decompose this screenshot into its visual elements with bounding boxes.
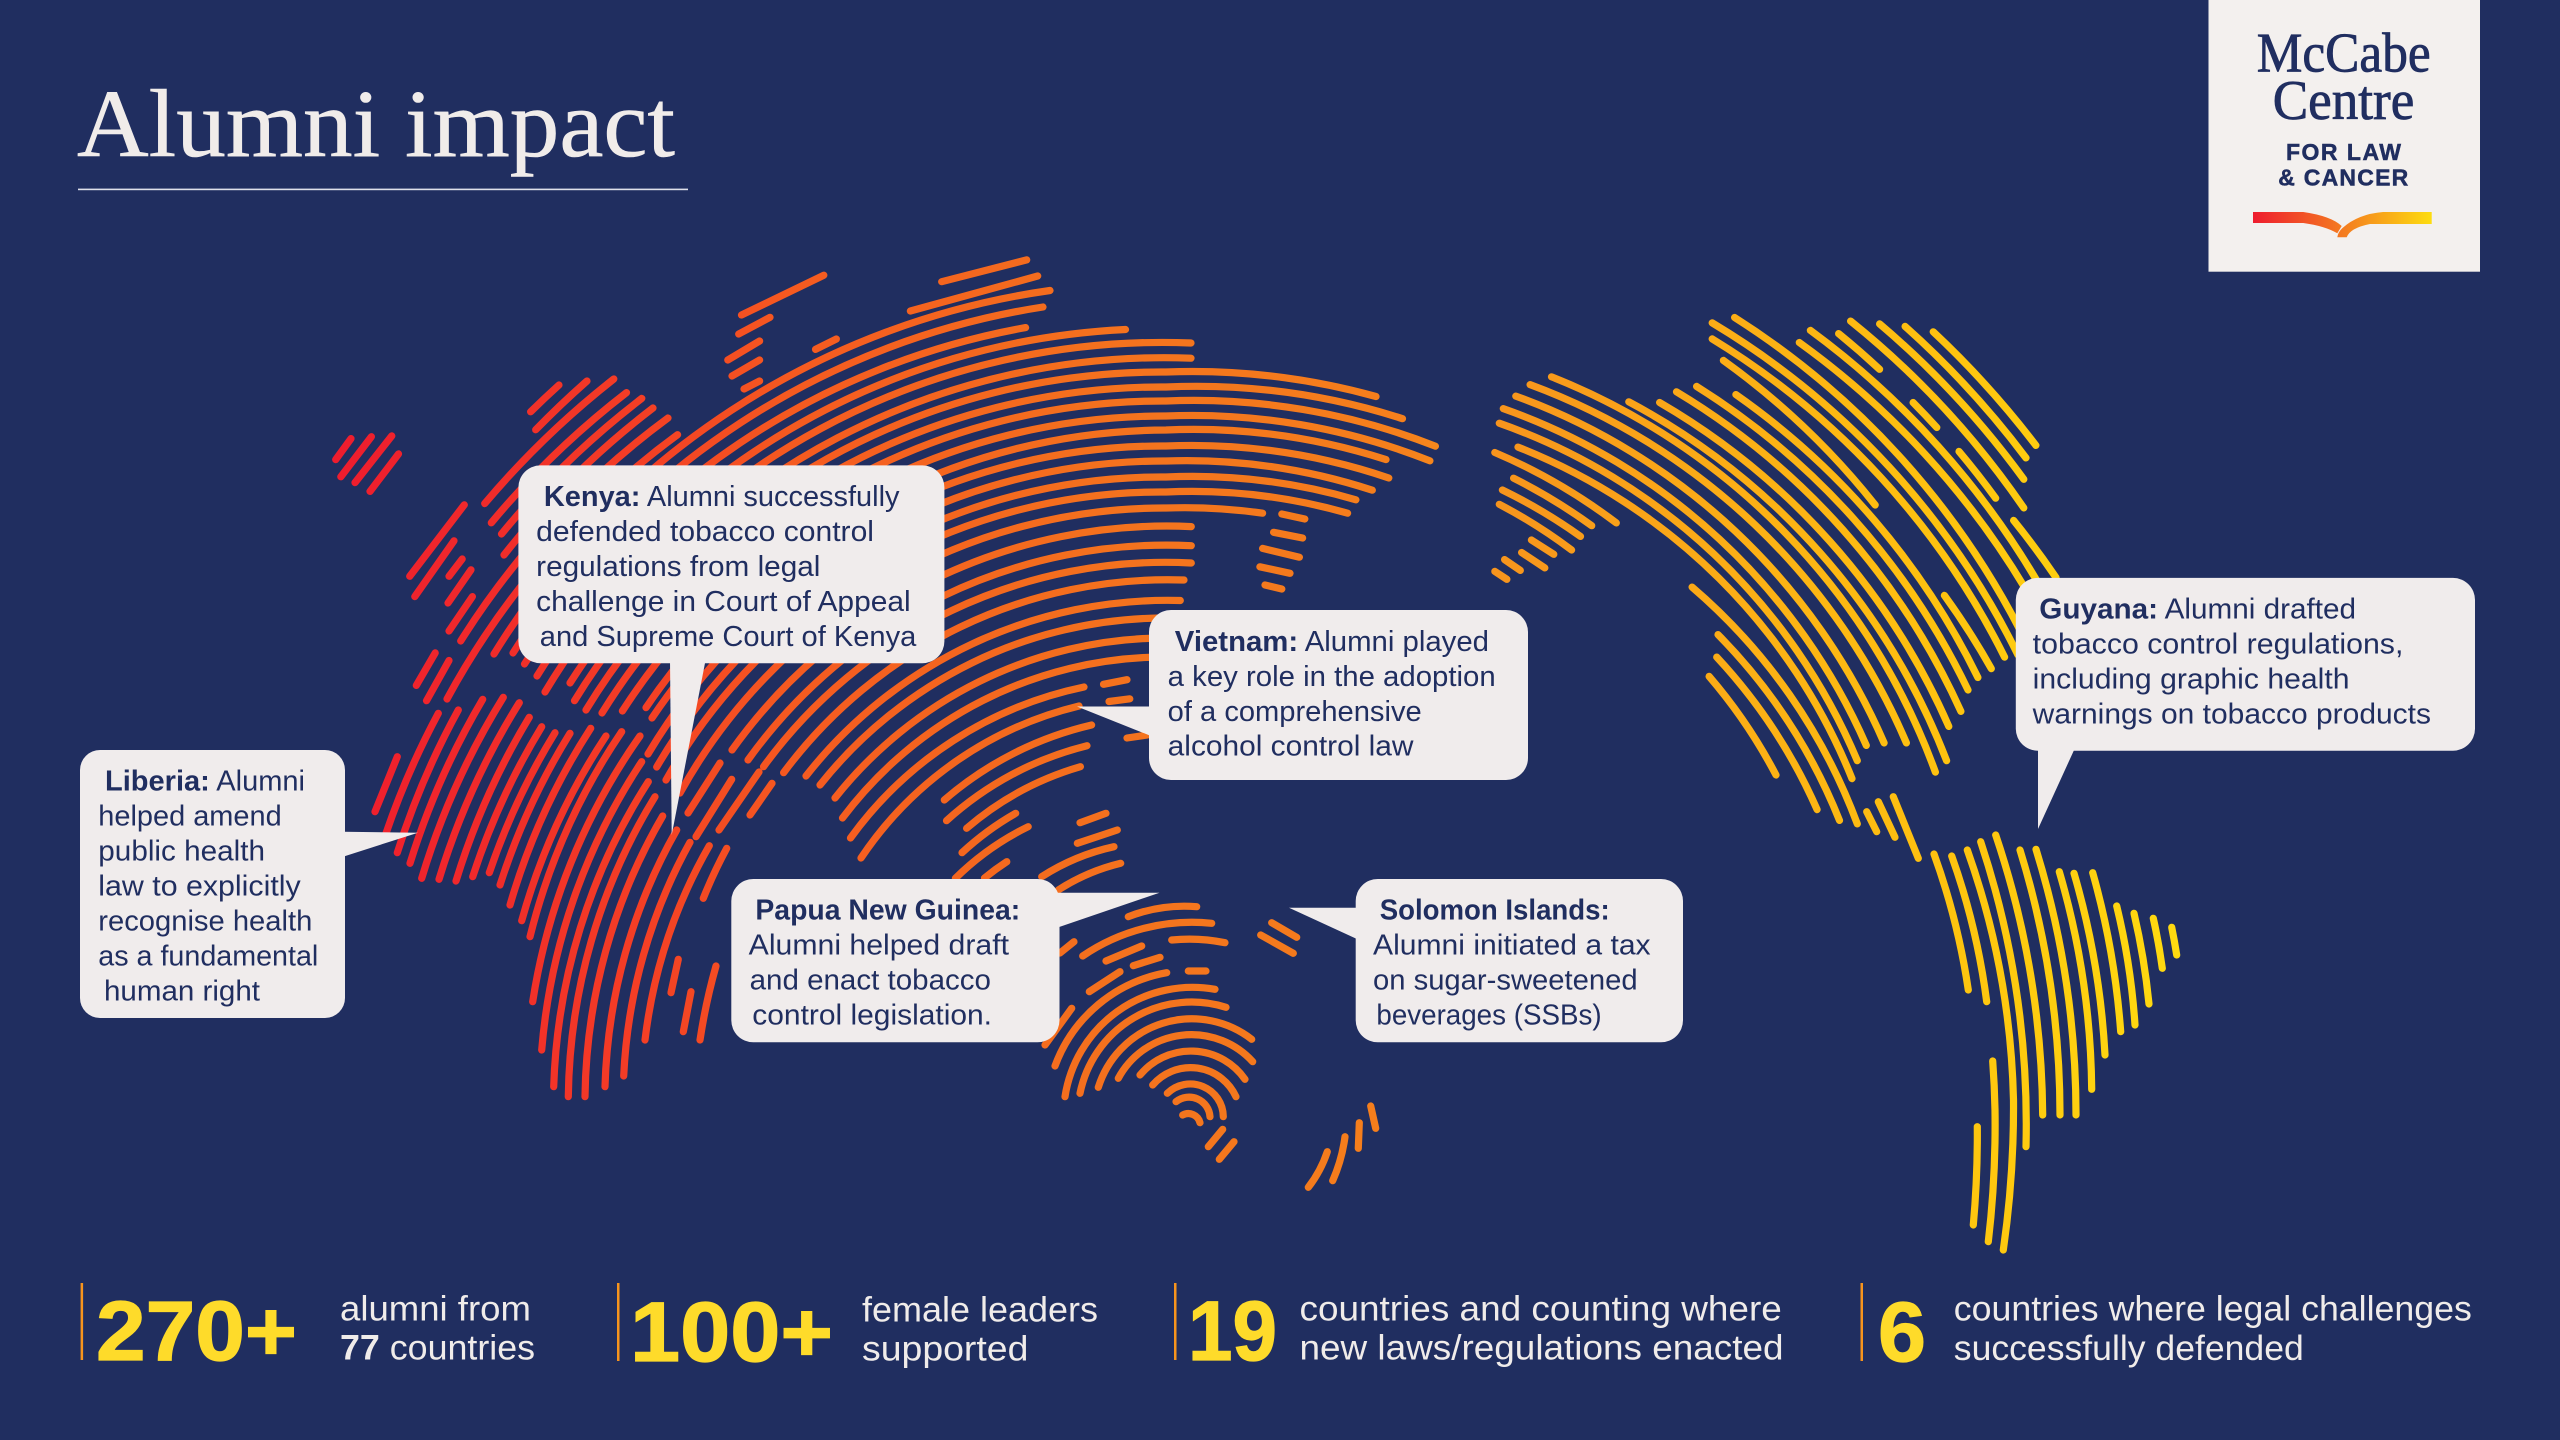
callout: Solomon Islands: on sugar-sweetened bbox=[1373, 964, 1638, 996]
callout: Papua New Guinea: Alumni helped draft bbox=[749, 929, 1009, 961]
logo: McCabe Centre for Law and Cancer: Centre bbox=[2273, 70, 2414, 132]
callout: Liberia bbox=[80, 750, 418, 1018]
callout: Vietnam: alcohol control law bbox=[1168, 730, 1414, 762]
callout: Kenya: Kenya: Alumni successfully bbox=[544, 481, 900, 513]
stat: 270+ alumni bbox=[81, 1283, 535, 1378]
map: Australia fingerprint bbox=[1045, 906, 1253, 1159]
callout: Vietnam: a key role in the adoption bbox=[1168, 661, 1496, 693]
stat: 100+ female leaders: female leaders bbox=[862, 1291, 1098, 1330]
callout: Guyana bbox=[2016, 578, 2475, 829]
callout: Kenya: regulations from legal bbox=[536, 551, 820, 583]
map: Pacific islands bbox=[1261, 923, 1376, 1187]
logo: McCabe Centre for Law and Cancer: FOR LAW bbox=[2286, 139, 2401, 165]
callout: Guyana: Guyana: Alumni drafted bbox=[2039, 594, 2356, 626]
callout: Liberia: public health bbox=[98, 836, 265, 868]
map: Africa bbox=[375, 697, 727, 1097]
callout: Guyana: tobacco control regulations, bbox=[2033, 629, 2403, 661]
stat: 6 countries: countries where legal challenges bbox=[1954, 1290, 2472, 1329]
callout: Solomon Islands: Solomon Islands: bbox=[1380, 894, 1610, 926]
map: Europe and Arctic islands bbox=[410, 260, 1038, 701]
callout: Solomon Islands: beverages (SSBs) bbox=[1376, 999, 1602, 1031]
callout: Kenya: and Supreme Court of Kenya bbox=[540, 621, 916, 653]
stat: 19 countries bbox=[1174, 1283, 1784, 1378]
callout: Guyana: warnings on tobacco products bbox=[2032, 699, 2431, 731]
logo: McCabe Centre for Law and Cancer: McCabe bbox=[2257, 23, 2431, 85]
stat: 270+ alumni: 77 countries bbox=[340, 1328, 535, 1367]
callout: Liberia: recognise health bbox=[98, 906, 312, 938]
stat: 100+ female leaders: 100+ bbox=[630, 1285, 833, 1379]
stat: 6 countries: successfully defended bbox=[1954, 1329, 2304, 1368]
world map: fingerprint line map bbox=[336, 260, 2177, 1250]
stat: 270+ alumni: alumni from bbox=[340, 1290, 531, 1329]
callout: Liberia: as a fundamental bbox=[98, 941, 318, 973]
stat: 19 countries: countries and counting where bbox=[1300, 1290, 1782, 1329]
map: South America bbox=[1934, 835, 2177, 1250]
callout: Vietnam: of a comprehensive bbox=[1168, 696, 1422, 728]
callout: Papua New Guinea: and enact tobacco bbox=[750, 964, 991, 996]
stat: 6 countries bbox=[1860, 1283, 2472, 1379]
callout: Vietnam bbox=[1077, 610, 1528, 780]
logo: McCabe Centre for Law and Cancer bbox=[2208, 0, 2480, 272]
stat: 6 countries: 6 bbox=[1878, 1285, 1926, 1379]
callout: Liberia: human right bbox=[104, 976, 260, 1008]
callout: Liberia: Liberia: Alumni bbox=[105, 766, 305, 798]
stat: 100+ female leaders bbox=[617, 1283, 1098, 1379]
callout: Kenya: defended tobacco control bbox=[536, 516, 874, 548]
logo: McCabe Centre for Law and Cancer: & CANCER bbox=[2278, 165, 2409, 191]
callout: Kenya: challenge in Court of Appeal bbox=[536, 586, 911, 618]
callout: Solomon Islands bbox=[1289, 879, 1683, 1042]
stat: 19 countries: new laws/regulations enacted bbox=[1300, 1328, 1784, 1367]
callout: Solomon Islands: Alumni initiated a tax bbox=[1373, 929, 1651, 961]
callout: Liberia: law to explicitly bbox=[98, 871, 301, 903]
callout: Papua New Guinea: Papua New Guinea: bbox=[755, 894, 1020, 926]
callout: Guyana: including graphic health bbox=[2033, 664, 2350, 696]
callout: Vietnam: Vietnam: Alumni played bbox=[1175, 626, 1489, 658]
callout: Papua New Guinea bbox=[731, 879, 1160, 1042]
callout: Papua New Guinea: control legislation. bbox=[752, 999, 992, 1031]
stat: 270+ alumni: 270+ bbox=[96, 1284, 297, 1378]
stat: 100+ female leaders: supported bbox=[862, 1330, 1028, 1369]
stat: 19 countries: 19 bbox=[1188, 1284, 1277, 1378]
title: Alumni impact bbox=[77, 70, 675, 177]
callout: Liberia: helped amend bbox=[98, 801, 282, 833]
map: North America bbox=[1495, 318, 2056, 858]
callout: Kenya bbox=[518, 465, 944, 835]
map: Asia arcs bbox=[494, 290, 1435, 890]
map: Greenland bbox=[336, 436, 398, 491]
